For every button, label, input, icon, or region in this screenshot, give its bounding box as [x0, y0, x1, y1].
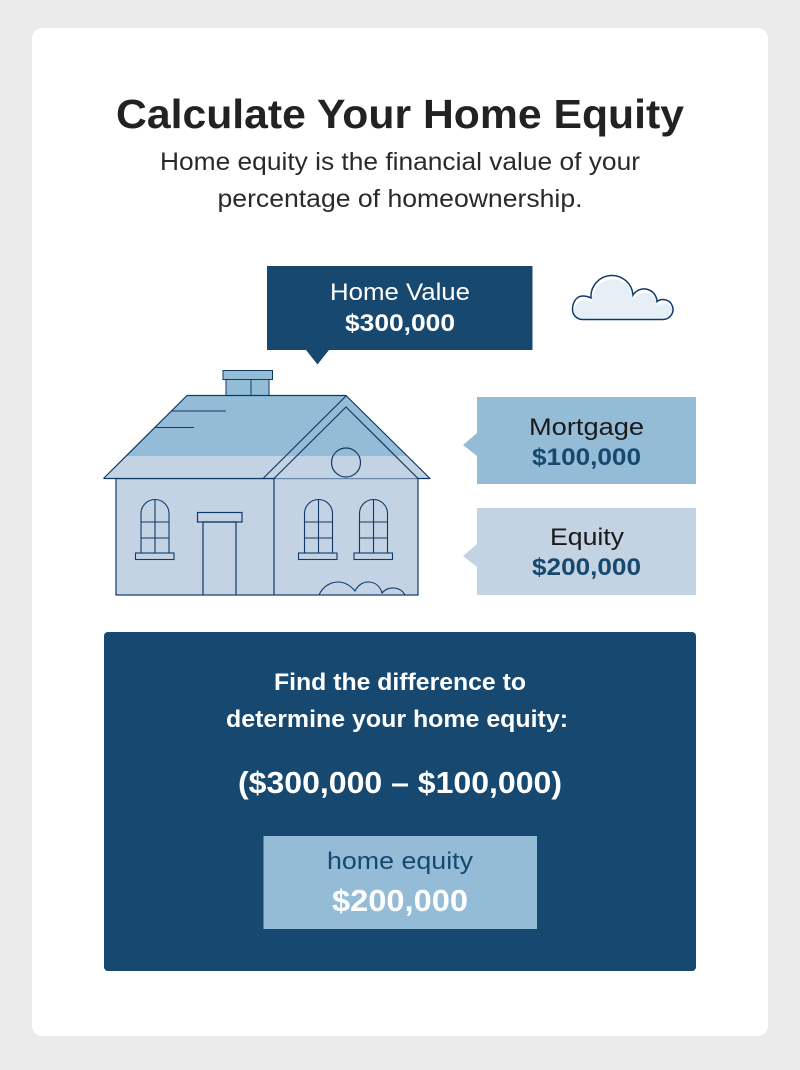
- result box: home equity: [327, 848, 473, 875]
- round attic window: [332, 448, 360, 477]
- callout: mortgage: $100,000: [532, 444, 641, 471]
- icon: cloud: [570, 274, 675, 324]
- calculation heading: determine your home equity:: [226, 706, 568, 733]
- title: Calculate Your Home Equity: [116, 91, 684, 137]
- subtitle: [160, 148, 640, 213]
- result box: $200,000: [332, 883, 468, 918]
- callout: equity: Equity: [550, 524, 624, 551]
- panel: calculation: [104, 632, 696, 971]
- callout: home value: $300,000: [345, 310, 455, 337]
- result box: [264, 836, 537, 929]
- callout: equity: [463, 508, 696, 595]
- subtitle: Home equity is the financial value of your: [160, 148, 640, 176]
- door: [198, 512, 242, 595]
- subtitle: percentage of homeownership.: [218, 185, 582, 213]
- window right: [354, 500, 392, 560]
- chimney: [223, 370, 272, 396]
- calculation heading: [226, 669, 568, 733]
- bush: [319, 582, 405, 595]
- callout: mortgage: Mortgage: [529, 414, 644, 441]
- window middle: [298, 500, 337, 560]
- callout: home value: [267, 266, 532, 364]
- roof: [104, 396, 430, 595]
- callout: equity: $200,000: [532, 554, 641, 581]
- callout: home value: Home Value: [330, 279, 470, 306]
- house walls: [116, 478, 418, 595]
- window left: [136, 500, 174, 560]
- formula: ($300,000 – $100,000): [238, 765, 562, 800]
- icon: house: [104, 370, 430, 595]
- calculation heading: Find the difference to: [274, 669, 526, 696]
- callout: mortgage: [463, 397, 696, 484]
